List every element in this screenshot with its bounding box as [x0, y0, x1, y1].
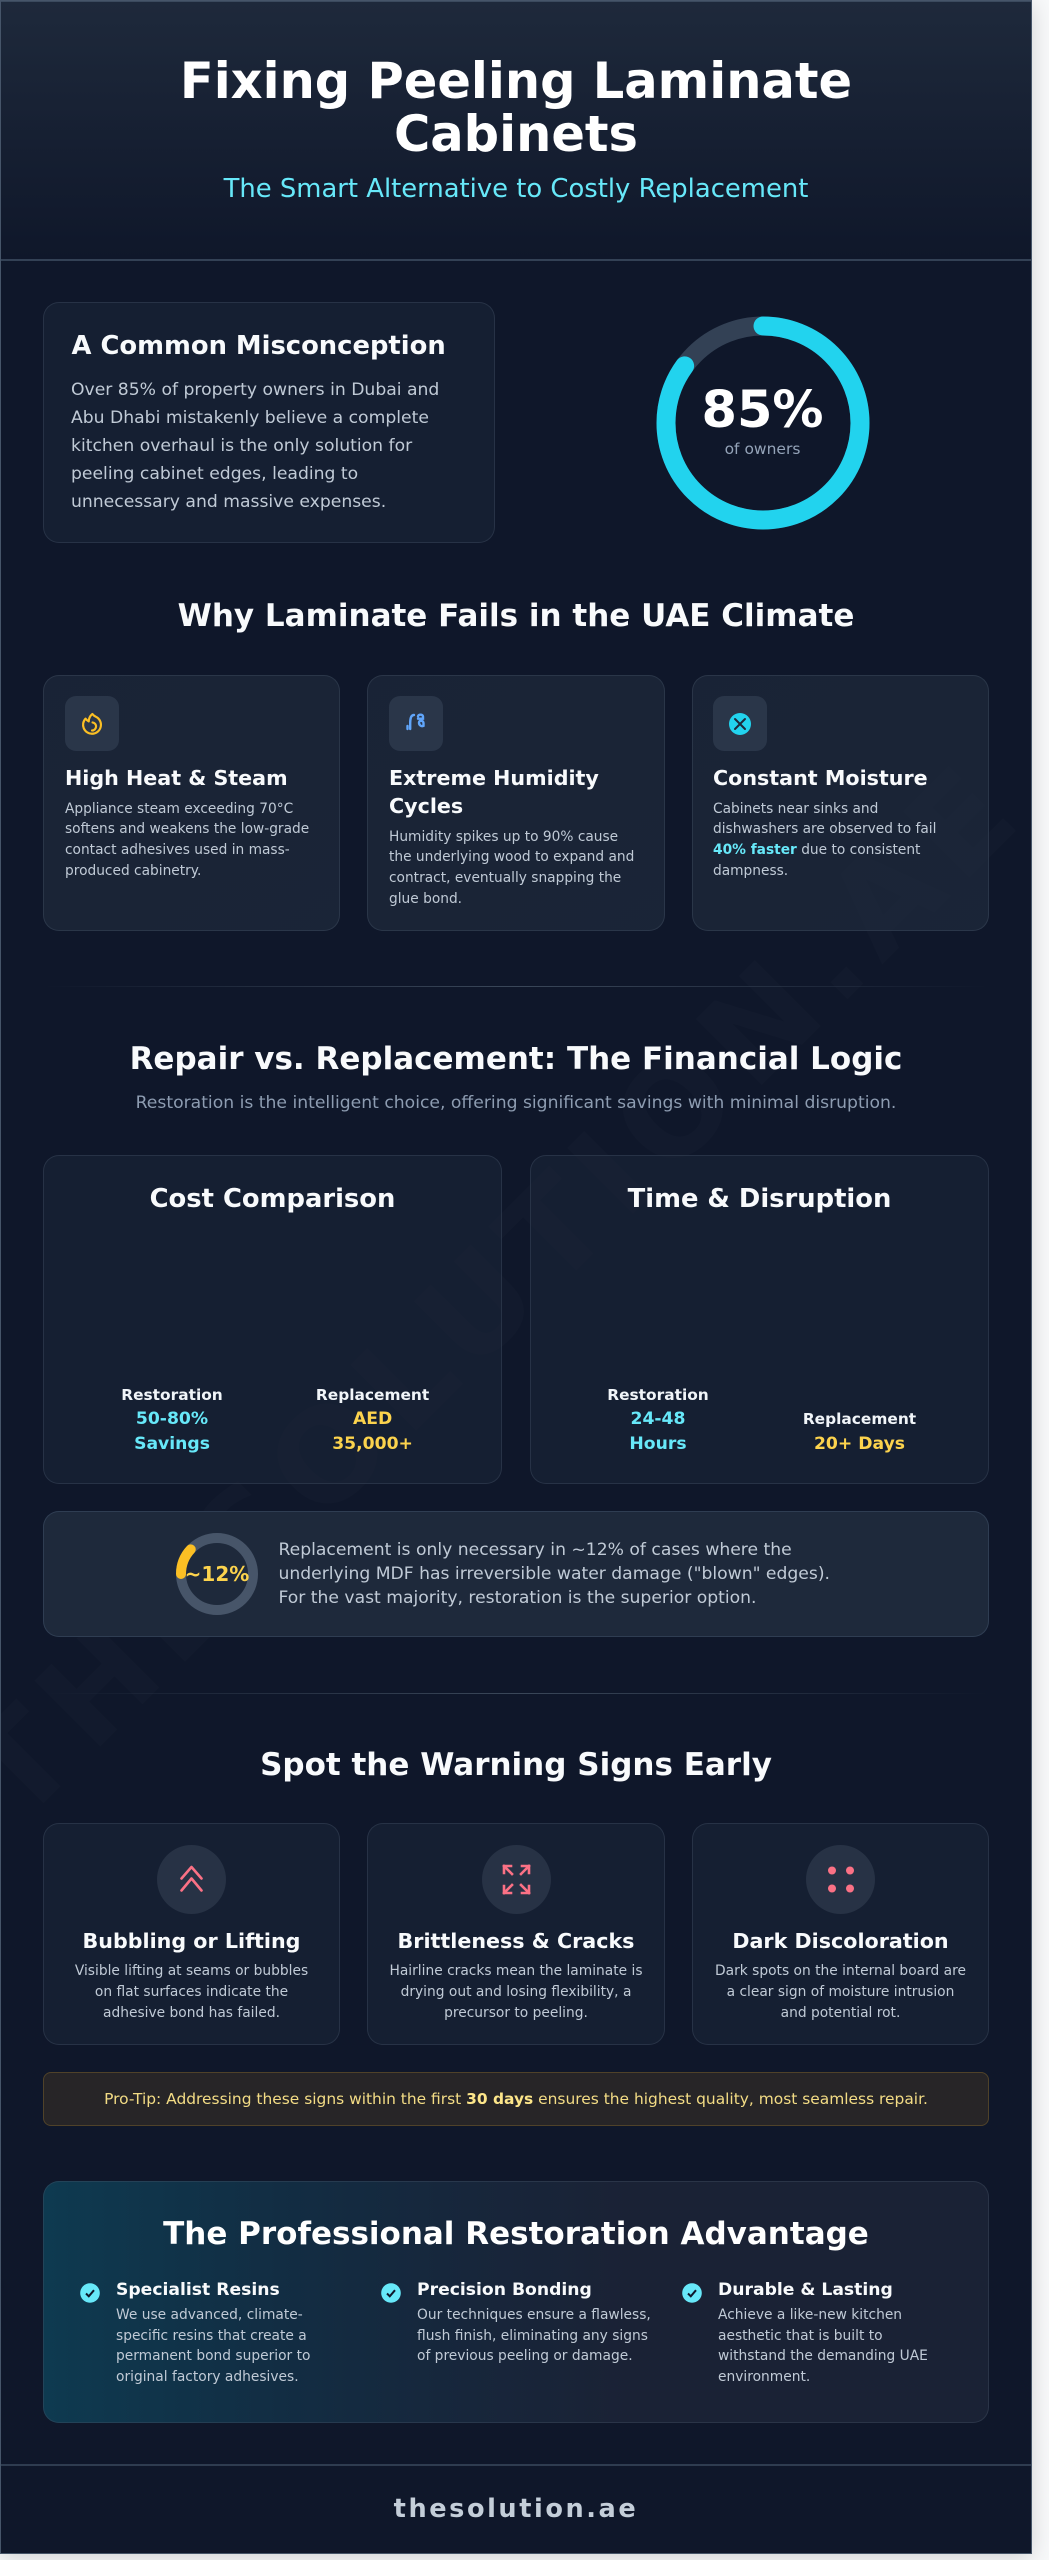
- panel title: Cost Comparison: [150, 1184, 395, 1214]
- restoration time: 24-48: [630, 1409, 685, 1429]
- benefit text: Our techniques ensure a flawless,: [417, 2307, 651, 2323]
- icon: dots: [806, 1844, 875, 1914]
- card text: [65, 801, 309, 879]
- donut caption: of owners: [725, 440, 800, 458]
- card text: Visible lifting at seams or bubbles: [75, 1963, 308, 1979]
- card title: Cycles: [389, 794, 463, 818]
- card title: High Heat & Steam: [65, 766, 288, 790]
- benefit text: specific resins that create a: [116, 2328, 307, 2344]
- title: [180, 52, 852, 162]
- replacement cost: Replacement: [316, 1386, 429, 1404]
- card text: 40% faster due to consistent: [713, 842, 920, 858]
- replacement time: [803, 1410, 916, 1454]
- replacement cost: [316, 1386, 429, 1454]
- header: [0, 0, 1032, 261]
- card title: Brittleness & Cracks: [398, 1929, 634, 1953]
- panel title: Time & Disruption: [628, 1184, 891, 1214]
- replacement time: Replacement: [803, 1410, 916, 1428]
- replacement cost: AED: [353, 1409, 392, 1429]
- benefit: specialist resins: [80, 2280, 310, 2385]
- card text: Humidity spikes up to 90% cause: [389, 829, 618, 845]
- replacement time: 20+ Days: [814, 1434, 905, 1454]
- callout text: [278, 1540, 830, 1608]
- restoration cost: 50-80%: [136, 1409, 208, 1429]
- restoration time: Hours: [629, 1434, 687, 1454]
- panel: professional restoration advantage: [43, 2181, 989, 2423]
- panel text: unnecessary and massive expenses.: [71, 492, 386, 512]
- card text: produced cabinetry.: [65, 863, 201, 879]
- heading: repair vs replacement: Repair vs. Replacement: The Financial Logic: [130, 1041, 902, 1077]
- card: bubbling or lifting: [43, 1823, 340, 2045]
- panel: time and disruption: [530, 1155, 989, 1484]
- card title: Bubbling or Lifting: [83, 1929, 300, 1953]
- card: dark discoloration: [692, 1823, 989, 2045]
- card text: contact adhesives used in mass-: [65, 842, 290, 858]
- icon: check: [381, 2283, 401, 2303]
- icon: check: [80, 2283, 100, 2303]
- footer: [0, 2464, 1032, 2554]
- card text: glue bond.: [389, 891, 462, 907]
- donut value: 85%: [701, 381, 824, 440]
- panel heading: A Common Misconception: [72, 331, 446, 361]
- icon: humidity: [389, 696, 443, 751]
- footer website: thesolution.ae: [394, 2494, 638, 2524]
- benefit text: [116, 2307, 310, 2385]
- card text: Dark spots on the internal board are: [715, 1963, 966, 1979]
- card text: Hairline cracks mean the laminate is: [389, 1963, 643, 1979]
- benefit title: Durable & Lasting: [718, 2280, 893, 2300]
- callout text: Replacement is only necessary in ~12% of cases where the: [278, 1540, 792, 1560]
- title: Fixing Peeling Laminate: [180, 52, 852, 110]
- icon: check: [682, 2283, 702, 2303]
- card text: Cabinets near sinks and: [713, 801, 878, 817]
- pro-tip text: Pro-Tip: Addressing these signs within the first 30 days ensures the highest quality, most seamless repair.: [104, 2090, 928, 2108]
- restoration cost: [121, 1386, 223, 1454]
- benefit text: withstand the demanding UAE: [718, 2348, 928, 2364]
- benefit text: flush finish, eliminating any signs: [417, 2328, 648, 2344]
- card text: adhesive bond has failed.: [103, 2005, 280, 2021]
- card text: dishwashers are observed to fail: [713, 821, 936, 837]
- panel: cost comparison: [43, 1155, 502, 1484]
- card title: Constant Moisture: [713, 766, 928, 790]
- panel text: Abu Dhabi mistakenly believe a complete: [71, 408, 429, 428]
- benefit: precision bonding: [381, 2280, 651, 2364]
- card text: a clear sign of moisture intrusion: [727, 1984, 954, 2000]
- card text: drying out and losing flexibility, a: [401, 1984, 631, 2000]
- icon: double chevron: [157, 1844, 226, 1914]
- benefit: durable and lasting: [682, 2280, 928, 2385]
- card text: the underlying wood to expand and: [389, 849, 634, 865]
- panel text: Over 85% of property owners in Dubai and: [71, 380, 439, 400]
- donut chart: 85% of owners: [656, 316, 870, 530]
- benefit text: [417, 2307, 651, 2364]
- panel: a common misconception: [43, 302, 495, 543]
- icon: flame: [65, 696, 119, 751]
- callout text: underlying MDF has irreversible water damage ("blown" edges).: [278, 1564, 830, 1584]
- callout: replacement only in 12% of cases: [43, 1511, 989, 1637]
- panel title: The Professional Restoration Advantage: [163, 2216, 869, 2252]
- panel text: kitchen overhaul is the only solution for: [71, 436, 412, 456]
- heading: why laminate fails: Why Laminate Fails in the UAE Climate: [178, 598, 854, 634]
- card text: contract, eventually snapping the: [389, 870, 621, 886]
- icon: expand arrows: [482, 1844, 550, 1914]
- restoration time: [607, 1386, 709, 1454]
- pro-tip banner: [43, 2072, 989, 2126]
- donut value: ~12%: [185, 1562, 249, 1586]
- panel text: [71, 380, 439, 512]
- card: constant moisture: [692, 675, 989, 931]
- panel text: peeling cabinet edges, leading to: [71, 464, 358, 484]
- benefit text: aesthetic that is built to: [718, 2328, 883, 2344]
- donut chart: 12%: [176, 1533, 258, 1615]
- card title: [389, 766, 599, 818]
- benefit text: of previous peeling or damage.: [417, 2348, 633, 2364]
- benefit text: [718, 2307, 928, 2385]
- benefit text: permanent bond superior to: [116, 2348, 310, 2364]
- card text: Appliance steam exceeding 70°C: [65, 801, 293, 817]
- restoration cost: Savings: [134, 1434, 210, 1454]
- benefit text: Achieve a like-new kitchen: [718, 2307, 902, 2323]
- benefit text: environment.: [718, 2369, 810, 2385]
- card: brittleness and cracks: [367, 1823, 665, 2045]
- card text: dampness.: [713, 863, 788, 879]
- replacement cost: 35,000+: [332, 1434, 413, 1454]
- card text: [715, 1963, 966, 2021]
- card text: precursor to peeling.: [444, 2005, 588, 2021]
- card text: softens and weakens the low-grade: [65, 821, 309, 837]
- benefit title: Specialist Resins: [116, 2280, 280, 2300]
- card text: [389, 829, 634, 907]
- card text: [713, 801, 936, 879]
- icon: cross circle: [713, 696, 767, 751]
- card title: Extreme Humidity: [389, 766, 599, 790]
- card text: and potential rot.: [781, 2005, 900, 2021]
- restoration cost: Restoration: [121, 1386, 223, 1404]
- card text: on flat surfaces indicate the: [95, 1984, 288, 2000]
- section subheading: Restoration is the intelligent choice, offering significant savings with minimal disruption.: [136, 1092, 896, 1112]
- card text: [75, 1963, 308, 2021]
- card: extreme humidity cycles: [367, 675, 665, 931]
- title: Cabinets: [394, 104, 638, 162]
- restoration time: Restoration: [607, 1386, 709, 1404]
- benefit text: We use advanced, climate-: [116, 2307, 303, 2323]
- card: high heat and steam: [43, 675, 340, 931]
- callout text: For the vast majority, restoration is the superior option.: [278, 1588, 757, 1608]
- benefit text: original factory adhesives.: [116, 2369, 299, 2385]
- heading: warning signs: Spot the Warning Signs Early: [260, 1747, 772, 1783]
- card text: [389, 1963, 643, 2021]
- benefit title: Precision Bonding: [417, 2280, 592, 2300]
- subtitle: The Smart Alternative to Costly Replacement: [224, 174, 808, 204]
- card title: Dark Discoloration: [732, 1929, 949, 1953]
